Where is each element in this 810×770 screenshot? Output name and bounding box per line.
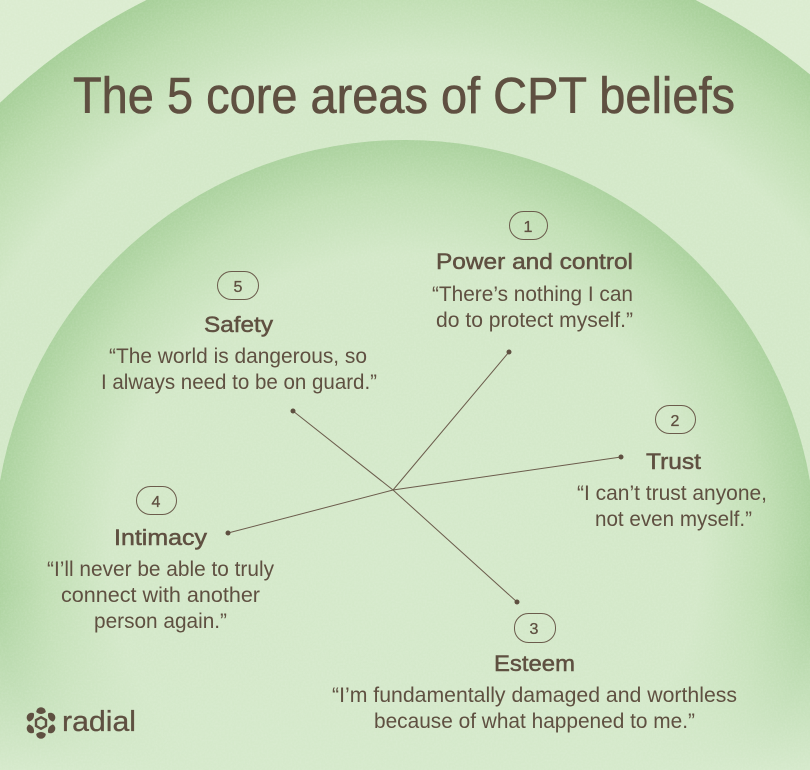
quote 5: “The world is dangerous, so (109, 345, 367, 368)
quote 1: do to protect myself.” (436, 309, 633, 332)
heading: intimacy: Intimacy (114, 525, 208, 550)
quote 3: because of what happened to me.” (374, 710, 695, 733)
quote 2: “I can’t trust anyone, (577, 482, 767, 505)
item 4: intimacy (47, 486, 274, 633)
number pill 3: 3 (530, 621, 539, 638)
heading: power and control: Power and control (436, 249, 633, 274)
heading: trust: Trust (646, 449, 702, 474)
number pill 1 (510, 212, 548, 240)
number pill 1: 1 (524, 219, 533, 236)
quote 3: “I’m fundamentally damaged and worthless (332, 684, 737, 707)
number pill 4: 4 (152, 494, 161, 511)
number pill 4 (136, 486, 176, 514)
number pill 3 (514, 614, 556, 642)
quote 5: I always need to be on guard.” (101, 371, 377, 394)
number pill 2 (656, 406, 696, 434)
connector lines (226, 350, 624, 604)
inner arch bottom fade (0, 590, 810, 770)
number pill 5 (218, 272, 258, 300)
number pill 2: 2 (671, 413, 680, 430)
quote 2: not even myself.” (595, 508, 752, 531)
quote 1: “There’s nothing I can (432, 283, 633, 306)
title: The 5 core areas of CPT beliefs (73, 67, 735, 124)
heading: esteem: Esteem (494, 651, 575, 676)
item 2: trust (577, 406, 767, 531)
number pill 5: 5 (234, 279, 243, 296)
wordmark: radial (62, 706, 136, 738)
item 1: power and control (432, 212, 633, 332)
radial logo (25, 706, 136, 739)
icon: flower mark (25, 707, 57, 739)
heading: safety: Safety (204, 312, 274, 337)
quote 4: person again.” (94, 610, 227, 633)
quote 4: “I’ll never be able to truly (47, 558, 274, 581)
quote 4: connect with another (61, 584, 260, 607)
item 5: safety (101, 272, 377, 394)
item 3: esteem (332, 614, 737, 733)
